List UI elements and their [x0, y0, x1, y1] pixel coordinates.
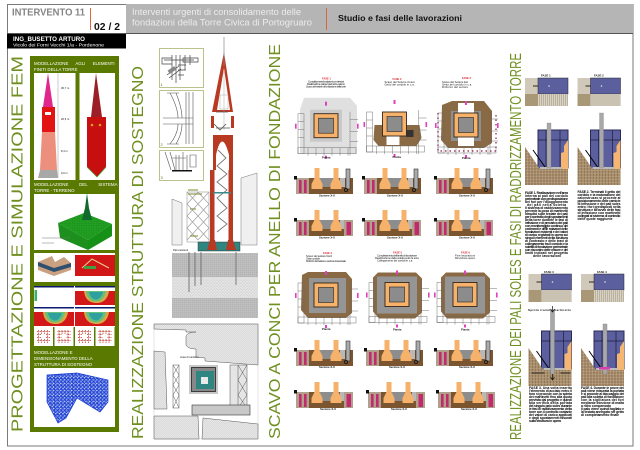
section row 2 — [294, 210, 493, 240]
intervention label: INTERVENTO 11 — [12, 8, 85, 18]
FEM tower: stress model: 30,7 m — [61, 86, 70, 90]
author address: Vicolo dei Forni Vecchi 1/a - Pordenone — [13, 42, 104, 48]
phase 6 plan: Fine lavorazioni — [455, 254, 475, 258]
phase 4 plan: FASE 4 — [323, 251, 332, 255]
jack label: Spinta tramite martinetto — [528, 308, 571, 312]
site plan — [154, 324, 258, 439]
section row 1: Sezione X-X — [319, 194, 335, 198]
caption: support structure: STRUTTURA DI SOSTEGNO — [34, 362, 93, 367]
tower masonry — [210, 37, 234, 242]
phase 2 small section — [578, 78, 620, 106]
header title background — [126, 4, 633, 33]
phase 2 description: di infissione con martinetti — [578, 211, 621, 215]
FEM tower: stress model: 20,5 m — [61, 117, 70, 121]
caption: tower elements: FINITI DELLA TORRE — [34, 67, 78, 72]
page number: 02 / 2 — [94, 22, 120, 33]
panel: pile phases 1 — [525, 74, 621, 258]
header rule — [7, 33, 633, 34]
phase 3 plan: FASE 3 — [462, 76, 471, 80]
phase 4 plan: Pianta — [322, 327, 331, 331]
phase 1 plan: FASE 1 — [322, 77, 331, 81]
phase labels: FASE 1 — [541, 74, 551, 78]
phase 1 description: di contrasto e delle travi di — [525, 239, 568, 243]
phase 3 description: alla verifica della portata — [529, 401, 572, 405]
phase 3 large section with jack — [528, 306, 572, 386]
phase 2 plan — [364, 77, 427, 159]
vertical heading: sostegno: REALIZZAZIONE STRUTTURA DI SOSTEGNO — [130, 66, 147, 439]
phase 3 small section — [528, 274, 572, 302]
phase 1 plan: Realizzazione pali sul perimetro esterno — [307, 82, 346, 86]
section row 4: Sezione X-X — [320, 407, 336, 411]
phase 4 description: con la sigillatura dei fori — [581, 398, 624, 402]
annotation labels: Pali esistenti — [173, 248, 188, 252]
caption: support structure: DIMENSIONAMENTO DELLA — [34, 356, 93, 361]
phase labels: FASE 4 — [597, 270, 607, 274]
phase 1 description: dei fori per l'alloggiamento — [525, 200, 568, 204]
phase 1 description: cedimenti e delle rotazioni delle — [525, 227, 568, 231]
phase 2 description: struttura e all'avvio delle fasi — [578, 208, 621, 212]
detail 2: 2 — [160, 142, 164, 147]
phase group: excavation plans, lower row — [295, 250, 498, 332]
phase 4 description: e si procede al bloccaggio dei — [581, 392, 624, 396]
section row 3: Sezione X-X — [389, 365, 405, 369]
ring stress sections — [34, 327, 114, 346]
phase 3 description: dei martinetti fino alla quota — [529, 395, 572, 399]
phase 2 plan: FASE 2 — [392, 77, 402, 81]
phase 3 plan: Getto del cordolo in c.a. — [442, 82, 472, 86]
scaffolding lattice — [187, 190, 209, 242]
detail 1: 1 — [160, 82, 164, 87]
detail 3 — [160, 150, 204, 180]
phase 4 description: la testata annegata nel getto — [581, 410, 624, 414]
FEM tower: mesh model — [80, 73, 115, 180]
phase 1 description: con monitoraggio continuo dei — [525, 224, 568, 228]
phase 1 small section — [525, 78, 568, 106]
phase 1 plan — [295, 77, 359, 160]
ground strata — [172, 252, 258, 318]
detail 2 — [160, 90, 204, 148]
phase 6 plan — [434, 250, 498, 332]
phase 1 description: collegamento tra il cordolo e la — [525, 242, 568, 246]
FEM tower: stress model: 8,4 m — [61, 149, 68, 153]
lattice scaffold — [173, 365, 247, 408]
phase 1 description: dei pali nella soletta — [527, 203, 566, 207]
section row 2: Sezione X-X — [459, 236, 475, 240]
section row 3: Sezione X-X — [459, 365, 475, 369]
phase 1 description: della torre durante le fasi di — [525, 218, 568, 222]
phase 3 description: del singolo palo soles durante — [529, 404, 572, 408]
section row 2: Sezione X-X — [387, 236, 403, 240]
caption: support structure: MODELLAZIONE E — [34, 350, 73, 355]
phase 3 description: foro si procede con la spinta — [529, 392, 572, 396]
caption: tower-ground: MODELLAZIONE DEL SISTEMA — [34, 182, 118, 187]
phase 1 description: singoli elementi della struttura — [525, 236, 568, 240]
detail 3: 3 — [160, 175, 164, 180]
phase 4 plan: Scavo del settore Nord — [306, 254, 332, 258]
phase 1 description: soletta di fondazione perimetrale — [525, 245, 568, 249]
phase 4 description: pali alla soletta di fondazione — [581, 395, 624, 399]
vertical heading: FEM: PROGETTAZIONE E SIMULAZIONE FEM — [10, 56, 26, 432]
phase 4 description: pali viene misurata la portata — [581, 389, 624, 393]
phase 3 plan: Scavo del Settore Est — [442, 80, 468, 84]
section row 1: Sezione X-X — [387, 194, 403, 198]
sections: lower rows — [294, 340, 495, 411]
phase group: excavation plans, upper row — [295, 76, 499, 160]
phase 3 description: dei valori di carico applicati — [529, 413, 572, 417]
phase 2 description: FASE 2. Terminati il getto del — [578, 190, 621, 194]
phase 3 description: FASE 3. Una volta inserito — [529, 386, 572, 390]
phase 4 description: Il palo viene quindi tagliato e — [581, 407, 624, 411]
phase 4 description: a ritiro compensato — [581, 404, 611, 408]
section row 4: Sezione X-X — [391, 407, 407, 411]
phase 1 description: fondazioni esistenti e dei valori — [525, 230, 568, 234]
phase 1 description: per il controllo degli spostamenti — [525, 215, 568, 219]
main title: fondazioni della Torre Civica di Portogruaro — [132, 18, 312, 28]
phase labels: FASE 3 — [544, 270, 554, 274]
phase 2 description: di infissione e dei pali soles — [578, 202, 621, 206]
phase 4 plan — [295, 251, 359, 331]
panel: pile phases 2 — [528, 270, 624, 423]
phase 4 large section — [581, 324, 624, 386]
foundation — [198, 240, 240, 251]
FEM tower: stress model — [34, 73, 76, 180]
phase 1 description: infissione e di precarico dei pali — [525, 221, 568, 225]
plan notes: Area di cantiere — [180, 355, 199, 359]
phase 1 description: delle lavorazioni — [533, 254, 561, 258]
phase labels: FASE 2 — [594, 74, 604, 78]
phase 5 plan: Collegamento dei cordoli in c.a. — [377, 258, 413, 262]
phase 5 plan: Realizzazione della soletta sotto la torre — [375, 256, 420, 260]
phase 1 description: perimetrale con predisposizione — [525, 197, 568, 201]
terrain mesh model — [34, 193, 115, 250]
phase 3 description: sulla struttura in opera — [529, 419, 561, 423]
phase 2 description: posizionamento delle camicie — [578, 199, 621, 203]
phase 6 plan: Rimozione opere — [455, 256, 476, 260]
orange divider — [90, 8, 91, 30]
blue support frame model — [34, 368, 115, 427]
phase 3 plan: Pianta — [462, 156, 471, 160]
section row 4 — [294, 382, 495, 411]
surrounding buildings — [154, 324, 258, 365]
phase 4 description: FASE 4. Durante le prove dei — [581, 386, 624, 390]
section row 2: Sezione X-X — [319, 236, 335, 240]
detail 1 — [160, 48, 204, 88]
phase 4 description: mediante iniezione di malta — [581, 401, 624, 405]
phase 6 plan: Pianta — [461, 328, 470, 332]
main title: Interventi urgenti di consolidamento delle — [132, 7, 301, 17]
left building — [172, 199, 182, 245]
phase 5 plan: Pianta — [393, 328, 402, 332]
section row 3: Sezione X-X — [319, 365, 335, 369]
phase 1 description: Il sistema di raddrizzamento — [525, 206, 568, 210]
panel: FEM modelling — [30, 56, 119, 432]
phase 1 description: idraulici sulle testate dei pali — [525, 212, 568, 216]
author name: ING_BUSETTO ARTURO — [13, 37, 85, 43]
phase 3 description: torre con il controllo costante — [529, 410, 572, 414]
section row 1 — [294, 168, 493, 198]
phase 3 plan: Rinforzo del settore — [442, 85, 468, 89]
section row 4: Sezione X-X — [461, 407, 477, 411]
FEM tower: stress model: 0,0 m — [61, 171, 68, 175]
phase 1 description: FASE 1. Realizzazione nell'area — [525, 191, 568, 195]
sections: upper rows — [294, 168, 493, 240]
tower square — [189, 365, 218, 394]
phase 3 description: prevista dal progetto e quindi — [529, 398, 572, 402]
phase 2 description: calcestruzzo si procede al — [578, 196, 621, 200]
section row 1: Sezione X-X — [459, 194, 475, 198]
phase 1 description: con riscontro delle misure e dei — [525, 248, 568, 252]
phase 1 plan: Pianta — [322, 156, 331, 160]
phase 4 plan: Getto cordolo — [306, 256, 320, 260]
phase 5 plan: FASE 5 — [393, 250, 402, 254]
phase 1 description: di carico registrati in opera sui — [525, 233, 568, 237]
section title: Studio e fasi delle lavorazioni — [338, 14, 462, 23]
caption: tower-ground: TORRE - TERRENO — [34, 188, 75, 193]
phase 3 plan — [435, 76, 499, 160]
phase 2 plan: Getto del cordolo in c.a. — [384, 82, 415, 86]
phase 1 description: interna ai pali del cordolo — [525, 194, 568, 198]
phase 2 description: cordolo e la maturazione del — [578, 193, 621, 197]
section row 3 — [294, 340, 493, 369]
phase 4 plan: Rinforzo del settore e sezione trasversale — [306, 259, 346, 263]
phase 4 small section — [581, 274, 624, 302]
phase 1 description: limiti indicati nel progetto — [525, 251, 568, 255]
caption: tower elements: MODELLAZIONE AGLI ELEMENTI — [34, 61, 115, 66]
phase 1 description: prevede la posa di martinetti — [525, 209, 568, 213]
green panel background — [30, 56, 119, 432]
phase 2 plan: Scavo del Settore Ovest — [384, 80, 415, 84]
phase 1 plan: Scavo del settore di fondazione della torre — [306, 85, 346, 89]
header band — [7, 4, 633, 34]
author block — [7, 34, 126, 48]
tower section drawing — [172, 37, 258, 318]
phase 2 plan: Pianta — [392, 155, 401, 159]
phase 4 description: di completamento finale — [581, 413, 619, 417]
phase 3 description: e degli spostamenti misurati — [529, 416, 572, 420]
phase 2 large section — [578, 113, 620, 185]
bottom scaffold band — [192, 405, 250, 415]
stress heat maps — [34, 286, 115, 327]
orange title divider — [326, 8, 327, 30]
author background — [7, 34, 126, 48]
phase 2 description: delle quote raggiunte — [578, 217, 613, 221]
vertical heading: scavo: SCAVO A CONCI PER ANELLO DI FONDAZIONE — [267, 44, 284, 439]
phase 2 description: entro i fori predisposti nella — [578, 205, 621, 209]
phase 5 plan — [366, 250, 430, 332]
phase 1 plan: Consolidamento fondazioni con iniezioni — [308, 80, 344, 84]
right building — [241, 173, 257, 245]
phase 3 description: le fasi di raddrizzamento della — [529, 407, 572, 411]
phase 5 plan: Completamento dell'anello di fondazione — [377, 254, 418, 258]
phase 1 large section — [525, 123, 568, 185]
phase 2 description: collegati al sistema di controllo — [578, 214, 620, 218]
geology and section model — [34, 253, 115, 282]
phase 6 plan: FASE 6 — [461, 250, 470, 254]
phase 3 description: l'elemento di acciaio entro il — [529, 389, 572, 393]
